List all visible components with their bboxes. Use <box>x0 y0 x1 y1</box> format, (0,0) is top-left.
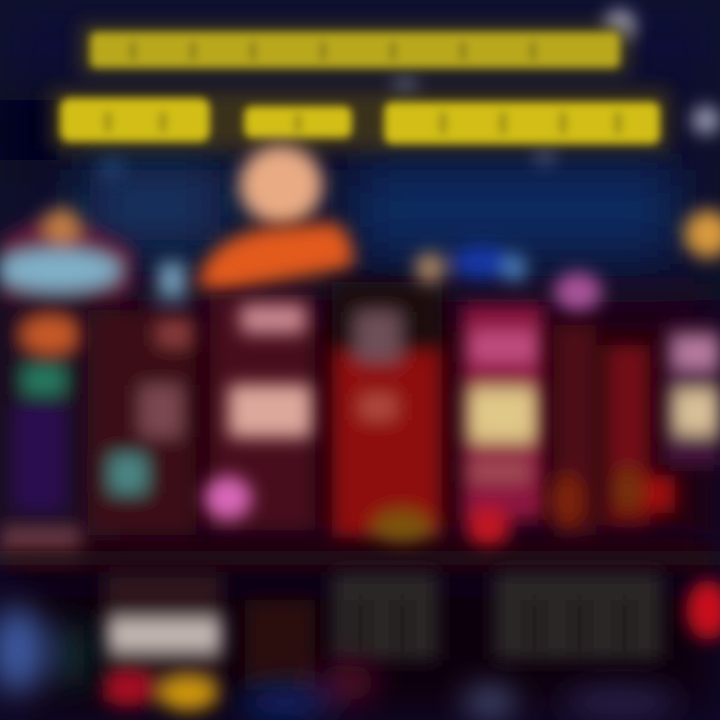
right characters <box>415 210 720 312</box>
second machine <box>88 262 196 535</box>
lower middle panel <box>332 572 438 660</box>
title <box>60 32 660 144</box>
title line 1 <box>90 32 620 68</box>
title glow <box>50 24 670 150</box>
pink machine <box>462 305 544 550</box>
machine body <box>210 295 315 530</box>
left machine <box>0 208 135 558</box>
title line 2 <box>60 98 660 144</box>
central machine with character <box>197 145 353 530</box>
lower left panel <box>102 572 222 711</box>
character orange body <box>197 222 353 292</box>
sky sparkles <box>100 10 720 180</box>
lower band <box>0 550 720 690</box>
red ball <box>686 580 720 640</box>
bottom left blue glow <box>0 606 86 694</box>
title letter gaps <box>105 42 621 134</box>
machine reels <box>204 304 312 520</box>
far right red machines <box>548 325 675 535</box>
bottom edge lights <box>240 664 680 716</box>
red machine <box>332 282 442 546</box>
character head <box>239 145 323 225</box>
lower right panel <box>494 572 662 660</box>
far right machine <box>664 325 720 465</box>
